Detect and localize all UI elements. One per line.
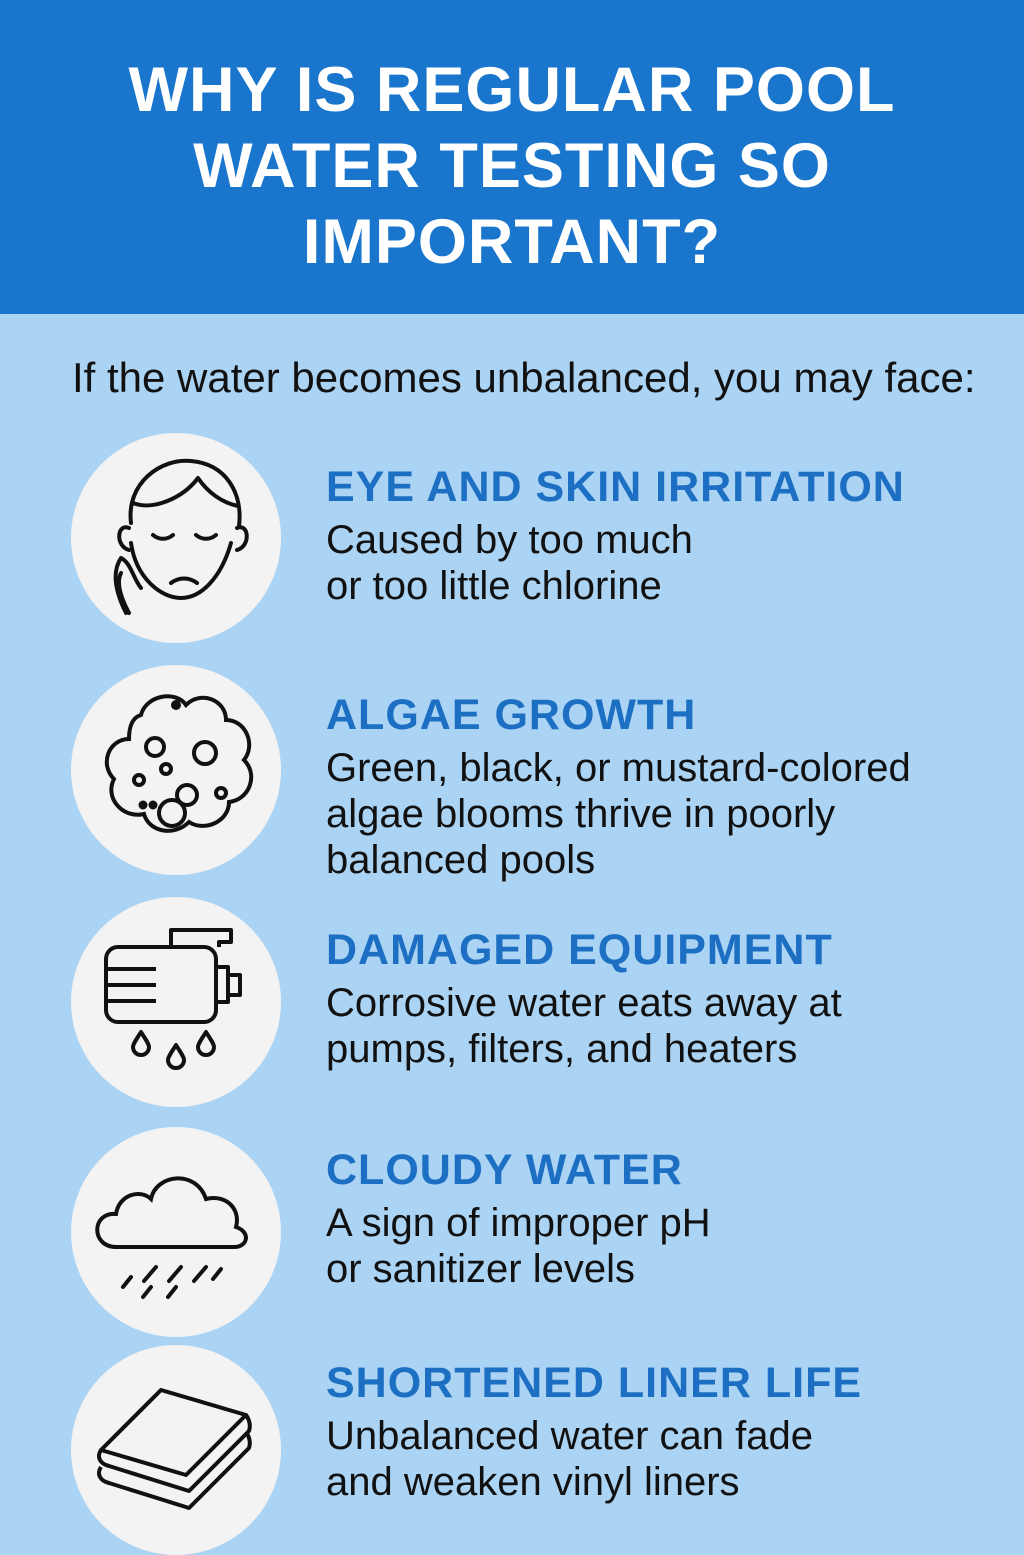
item: algae growth: ALGAE GROWTH xyxy=(326,691,696,739)
title: WHY IS REGULAR POOL xyxy=(129,55,895,125)
item: shortened liner life: Unbalanced water can fade xyxy=(326,1414,813,1458)
icon: face irritation xyxy=(71,433,281,643)
icon: pump equipment xyxy=(71,897,281,1107)
item: cloudy water xyxy=(326,1146,711,1291)
item: eye and skin: EYE AND SKIN IRRITATION xyxy=(326,463,905,511)
item: shortened liner life: SHORTENED LINER LIFE xyxy=(326,1359,862,1407)
item: algae growth: algae blooms thrive in poorly xyxy=(326,792,835,836)
title: IMPORTANT? xyxy=(303,207,721,277)
item: damaged equipment xyxy=(326,926,842,1071)
title: WATER TESTING SO xyxy=(193,131,831,201)
title xyxy=(128,55,895,277)
item: cloudy water: or sanitizer levels xyxy=(326,1247,635,1291)
item: cloudy water: A sign of improper pH xyxy=(326,1201,711,1245)
item: eye and skin: or too little chlorine xyxy=(326,564,662,608)
item: shortened liner life: and weaken vinyl liners xyxy=(326,1460,740,1504)
item: damaged equipment: DAMAGED EQUIPMENT xyxy=(326,926,833,974)
item: eye and skin xyxy=(326,463,905,608)
item: damaged equipment: Corrosive water eats away at xyxy=(326,981,842,1025)
item: eye and skin: Caused by too much xyxy=(326,518,693,562)
item: algae growth: Green, black, or mustard-colored xyxy=(326,746,911,790)
header band xyxy=(0,0,1024,314)
item: cloudy water: CLOUDY WATER xyxy=(326,1146,683,1194)
item: damaged equipment: pumps, filters, and heaters xyxy=(326,1027,797,1071)
icon: liner layers xyxy=(71,1345,281,1555)
item: algae growth xyxy=(326,691,911,882)
icon: rain cloud xyxy=(71,1127,281,1337)
item: algae growth: balanced pools xyxy=(326,838,595,882)
icon: algae xyxy=(71,665,281,875)
item: shortened liner life xyxy=(326,1359,862,1504)
subtitle: If the water becomes unbalanced, you may face: xyxy=(72,354,976,401)
